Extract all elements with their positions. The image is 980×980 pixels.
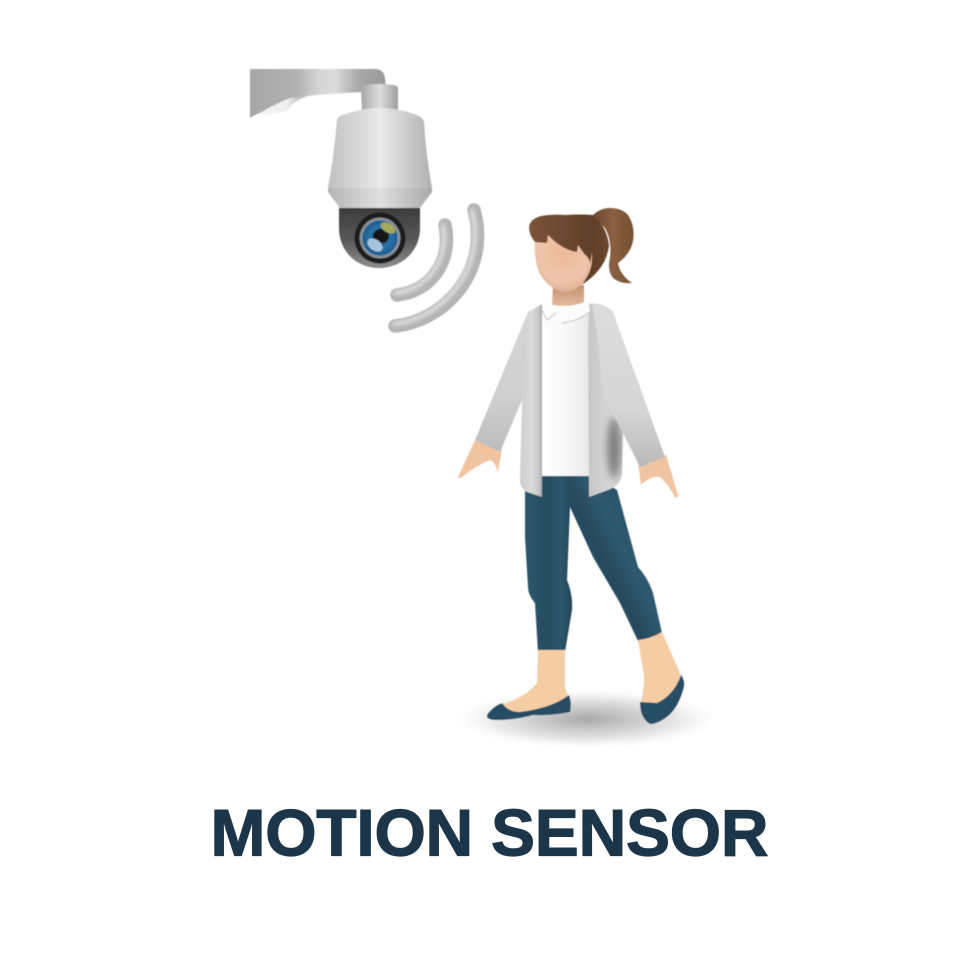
bracket underside highlight — [257, 96, 307, 116]
right sleeve — [592, 303, 665, 467]
face — [535, 228, 592, 292]
inner wave — [396, 225, 447, 295]
motion waves — [394, 210, 478, 326]
camera neck — [361, 84, 398, 112]
left sleeve — [475, 312, 528, 452]
pants: left leg — [525, 472, 572, 653]
left hand — [458, 438, 502, 478]
left shoe — [487, 695, 571, 720]
collar outline — [542, 310, 590, 323]
front hair — [529, 214, 594, 263]
camera collar band — [328, 188, 432, 208]
white shirt — [541, 315, 590, 476]
woman figure — [458, 208, 684, 724]
camera body — [328, 108, 432, 188]
right hand — [638, 455, 678, 498]
right ankle — [638, 632, 682, 708]
back hair — [570, 216, 609, 284]
camera lens — [354, 212, 406, 264]
title: MOTION SENSOR — [210, 795, 768, 869]
camera dome — [339, 208, 420, 268]
ponytail — [592, 208, 634, 283]
outer wave — [394, 210, 478, 326]
camera — [250, 69, 432, 268]
left ankle — [500, 650, 569, 716]
pants: right leg — [565, 472, 662, 641]
illustration: motion sensor poster — [214, 68, 768, 857]
floor shadow — [451, 688, 723, 750]
jacket left panel — [520, 304, 542, 497]
shirt collar — [542, 300, 590, 323]
jacket right panel — [588, 303, 623, 497]
jacket right panel shading — [607, 418, 621, 478]
neck — [552, 285, 584, 312]
right shoe — [640, 675, 684, 724]
wall bracket — [250, 69, 386, 118]
